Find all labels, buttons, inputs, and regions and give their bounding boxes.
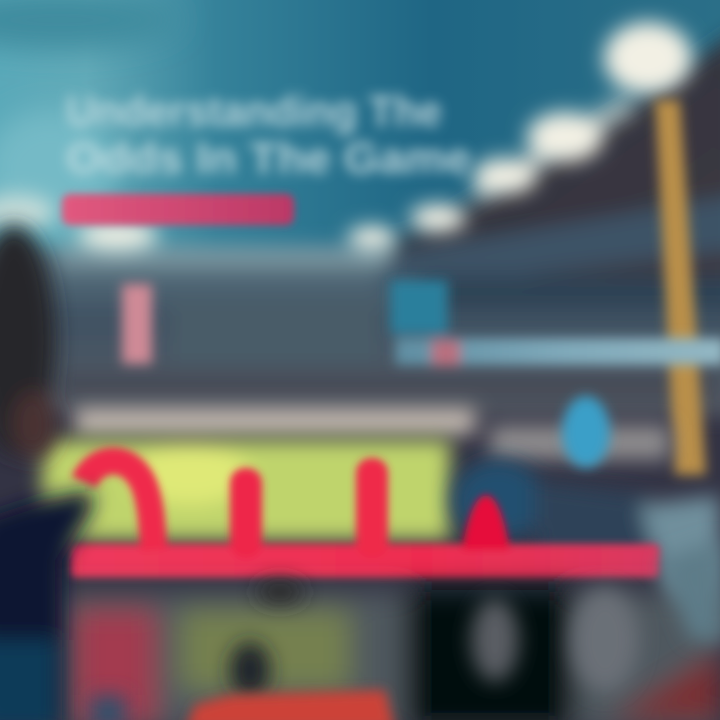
red graphic shape [70, 458, 660, 578]
title text [66, 87, 471, 183]
crowd band above the pitch [75, 408, 670, 460]
clouds along the roof edge [0, 22, 692, 250]
category badge [62, 194, 294, 225]
foreground figure on the left [0, 225, 92, 720]
spectators on the right [562, 396, 610, 468]
pitch [42, 440, 450, 540]
lower crowd [60, 590, 720, 720]
title text: Understanding The [66, 87, 442, 136]
title text: Odds In The Game [66, 134, 471, 183]
background: stadium stands [0, 30, 720, 415]
sky shading [0, 0, 180, 230]
floodlight pole [655, 100, 706, 475]
stand details: pink banner, blue panel, light band [122, 280, 720, 366]
red panel at the bottom [185, 690, 395, 720]
background: sky [0, 0, 720, 300]
